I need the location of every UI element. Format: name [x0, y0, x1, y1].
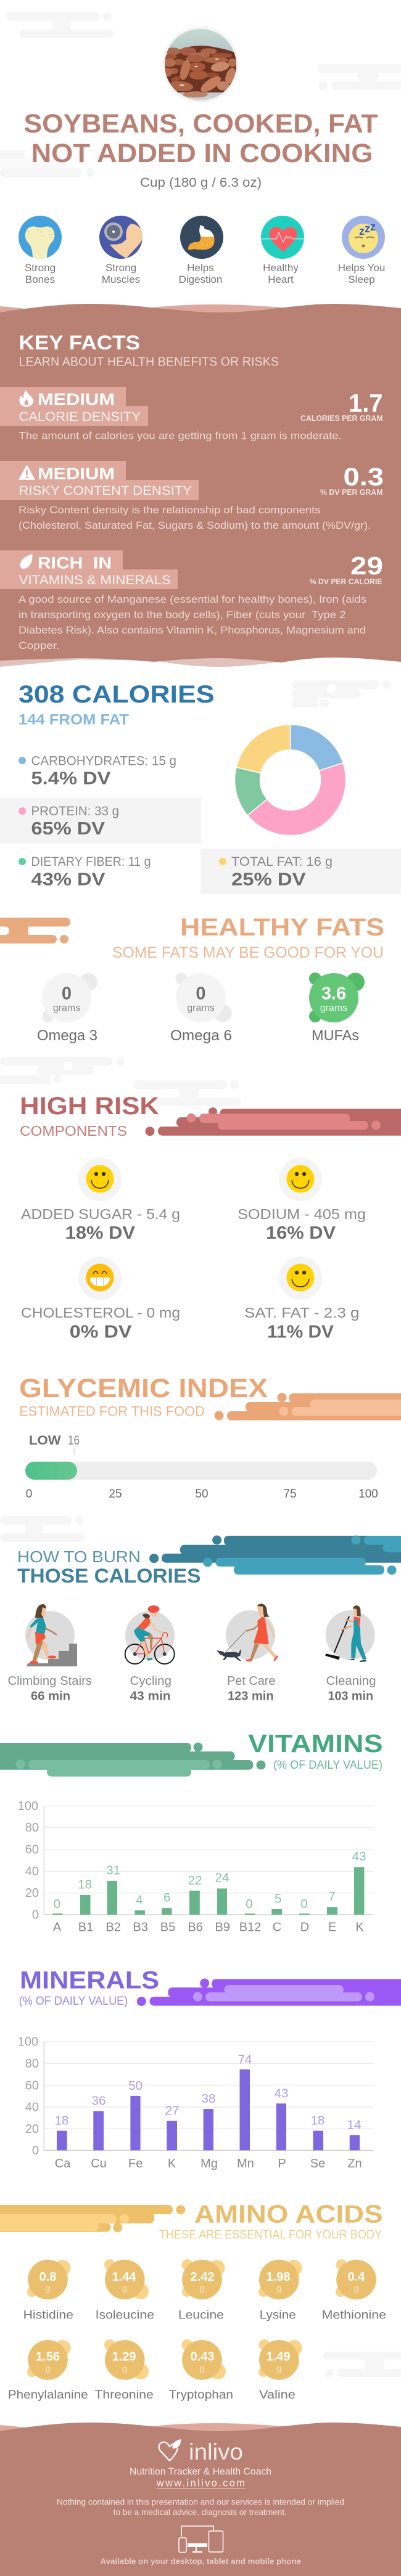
amino acids heading: THESE ARE ESSENTIAL FOR YOUR BODY [159, 2228, 382, 2242]
minerals bar chart: K [168, 2157, 176, 2170]
vitamins bar chart: 43 [352, 1849, 366, 1864]
amino: isoleucine: g [122, 2283, 127, 2294]
disclaimer: to be a medical advice, diagnosis or treatment. [114, 2508, 287, 2517]
amino: tryptophan: g [199, 2363, 205, 2374]
fact: calorie density: The amount of calories you are getting from 1 gram is moderate. [19, 430, 342, 441]
fact: rich in vitamins and minerals: VITAMINS & MINERALS [19, 573, 171, 587]
amino: lysine [258, 2260, 302, 2321]
activity: cleaning: 103 min [328, 1690, 373, 1703]
amino: lysine: Lysine [260, 2309, 296, 2321]
amino acids heading: AMINO ACIDS [194, 2200, 383, 2228]
amino: phenylalanine: 1.56 [36, 2350, 60, 2364]
amino: histidine: g [45, 2283, 51, 2294]
vitamins heading: (% OF DAILY VALUE) [273, 1759, 382, 1772]
benefit: helps digestion [179, 216, 223, 285]
macro: total fat: TOTAL FAT: 16 g [231, 855, 333, 869]
activity: climbing stairs: Climbing Stairs [7, 1674, 92, 1688]
healthy fats heading: HEALTHY FATS [180, 914, 384, 941]
food photo: beans [162, 26, 239, 103]
amino: leucine: Leucine [178, 2309, 224, 2321]
amino: isoleucine [96, 2259, 154, 2321]
risk: added sugar [21, 1158, 180, 1243]
fat: MUFAs: 3.6 [321, 984, 346, 1004]
benefit: helps you sleep: Sleep [348, 274, 375, 285]
benefit: healthy heart: Healthy [263, 262, 299, 274]
benefit: strong muscles: Strong [105, 262, 136, 274]
minerals heading [19, 1967, 159, 2008]
footer panel [0, 2423, 401, 2576]
activity: cycling: 43 min [130, 1690, 170, 1703]
healthy fats decoration [0, 918, 70, 944]
vitamins bar chart: 100 [18, 1800, 38, 1813]
amino: methionine: 0.4 [348, 2270, 365, 2284]
amino: threonine [94, 2339, 154, 2402]
vitamins bar chart: 6 [163, 1891, 170, 1904]
benefit: helps digestion: Digestion [179, 274, 222, 285]
macro: protein [0, 798, 201, 844]
activity: climbing stairs [7, 1604, 92, 1703]
activity: cleaning: Cleaning [326, 1674, 376, 1688]
glycemic index gauge: 0 [26, 1488, 32, 1501]
fact: calorie density: CALORIES PER GRAM [300, 414, 382, 423]
minerals decoration [137, 1978, 401, 2006]
risk: sodium: SODIUM - 405 mg [238, 1206, 366, 1222]
risk: cholesterol: 0% DV [70, 1323, 132, 1342]
macro: total fat [200, 849, 401, 894]
minerals bar chart: 100 [18, 2035, 38, 2048]
minerals bar chart: Se [310, 2157, 325, 2170]
benefit: strong bones: Strong [25, 262, 56, 274]
disclaimer: Nothing contained in this presentation and our services is intended or implied [57, 2497, 344, 2507]
title: SOYBEANS, COOKED, FAT [23, 109, 378, 139]
vitamins bar chart: 7 [328, 1889, 336, 1904]
minerals bar chart: 0 [32, 2144, 39, 2158]
amino acids heading [159, 2200, 383, 2242]
amino: lysine: g [276, 2283, 281, 2294]
amino: threonine: g [122, 2363, 127, 2374]
fact: risky content density: RISKY CONTENT DENSITY [19, 484, 192, 498]
fat: omega 3: Omega 3 [37, 1027, 97, 1044]
fact: risky content density: % DV PER GRAM [320, 488, 382, 497]
amino: threonine: 1.29 [112, 2350, 136, 2364]
glycemic index gauge: 16 [68, 1433, 80, 1448]
glycemic index gauge: 100 [358, 1488, 378, 1501]
healthy fats heading: SOME FATS MAY BE GOOD FOR YOU [112, 944, 384, 961]
amino: phenylalanine: g [45, 2363, 51, 2374]
risk: saturated fat: 11% DV [267, 1323, 334, 1342]
fat: omega 6 [170, 972, 232, 1044]
vitamins bar chart: K [355, 1921, 364, 1934]
vitamins bar chart: E [328, 1921, 336, 1934]
fat: omega 6: grams [187, 1003, 215, 1014]
minerals bar chart: 74 [238, 2052, 252, 2067]
amino: leucine: 2.42 [191, 2270, 214, 2284]
macro: carbohydrates [19, 754, 176, 789]
minerals bar chart: P [278, 2157, 286, 2170]
amino: phenylalanine [8, 2340, 88, 2402]
benefit: helps you sleep [338, 216, 385, 285]
glycemic index gauge: LOW [29, 1433, 61, 1448]
glycemic index heading: GLYCEMIC INDEX [19, 1374, 268, 1403]
amino: threonine: Threonine [94, 2389, 154, 2402]
vitamins bar chart: B5 [160, 1921, 175, 1934]
amino: valine: g [276, 2363, 281, 2374]
amino: methionine: Methionine [322, 2309, 386, 2321]
amino: tryptophan [169, 2339, 233, 2402]
minerals bar chart: 38 [202, 2092, 215, 2106]
activity: cycling [125, 1605, 175, 1703]
key facts heading: KEY FACTS [19, 332, 140, 354]
activity: pet care: Pet Care [227, 1674, 275, 1688]
vitamins heading: VITAMINS [248, 1729, 383, 1758]
fat: omega 3: 0 [62, 984, 72, 1004]
benefit: strong bones [19, 216, 62, 285]
vitamins bar chart: 24 [215, 1871, 229, 1885]
fat: omega 3: grams [53, 1003, 80, 1014]
minerals bar chart: 20 [25, 2122, 39, 2136]
activity: climbing stairs: 66 min [31, 1690, 70, 1703]
risk: saturated fat: SAT. FAT - 2.3 g [244, 1305, 359, 1321]
minerals heading: MINERALS [20, 1967, 159, 1994]
macro: dietary fiber [19, 855, 151, 890]
fact: risky content density [0, 461, 384, 531]
amino: tryptophan: Tryptophan [169, 2389, 233, 2402]
vitamins bar chart: B3 [133, 1921, 148, 1934]
vitamins bar chart: 60 [25, 1843, 39, 1856]
vitamins bar chart: B2 [105, 1921, 121, 1934]
vitamins decoration [0, 1743, 265, 1777]
disclaimer [57, 2497, 344, 2517]
key facts heading: LEARN ABOUT HEALTH BENEFITS OR RISKS [19, 355, 279, 369]
fact: rich in vitamins and minerals: Diabetes Risk). Also contains Vitamin K, Phosphorus, Magnesium and [19, 624, 366, 636]
benefit: helps you sleep: z [365, 222, 370, 235]
benefit: healthy heart: Heart [268, 274, 294, 285]
fact: rich in vitamins and minerals: Copper. [19, 640, 59, 651]
fact: rich in vitamins and minerals: 29 [350, 552, 383, 580]
activity: pet care: 123 min [228, 1690, 274, 1703]
glycemic index gauge: 75 [283, 1488, 297, 1501]
minerals bar chart: Mn [237, 2157, 254, 2170]
fact: risky content density: Risky Content density is the relationship of bad components [19, 504, 321, 516]
serving size: Cup (180 g / 6.3 oz) [140, 176, 262, 190]
amino acids decoration [0, 2205, 185, 2232]
availability note: Available on your desktop, tablet and mobile phone [100, 2556, 301, 2566]
activity: pet care [217, 1604, 278, 1703]
burn calories heading: HOW TO BURN [17, 1547, 141, 1566]
vitamins bar chart: 0 [32, 1908, 39, 1922]
fact: calorie density: CALORIE DENSITY [19, 410, 141, 424]
tagline: Nutrition Tracker & Health Coach [130, 2466, 271, 2477]
vitamins bar chart: 80 [25, 1821, 39, 1835]
high risk heading [20, 1093, 159, 1139]
macro: protein: PROTEIN: 33 g [31, 804, 119, 818]
panel: key facts [0, 304, 401, 667]
inlivo logo: inlivo [189, 2439, 243, 2464]
fact: rich in vitamins and minerals: A good source of Manganese (essential for healthy bones), Iron (aids [19, 593, 366, 605]
inlivo logo [159, 2439, 243, 2464]
healthy fats heading [112, 914, 384, 961]
vitamins bar chart: 22 [188, 1873, 202, 1888]
burn calories heading: THOSE CALORIES [17, 1565, 201, 1587]
calories heading: 144 FROM FAT [19, 712, 129, 728]
vitamins heading [248, 1729, 383, 1772]
amino: histidine: 0.8 [39, 2270, 56, 2284]
calories heading [19, 681, 215, 728]
amino: valine: 1.49 [267, 2350, 290, 2364]
amino: histidine: Histidine [23, 2309, 73, 2321]
fat: omega 6: 0 [196, 984, 206, 1004]
minerals bar chart: Mg [200, 2157, 218, 2170]
macro: carbohydrates: 5.4% DV [31, 769, 111, 789]
fact: rich in vitamins and minerals [0, 550, 383, 651]
minerals bar chart: Cu [91, 2157, 107, 2170]
fact: calorie density [0, 387, 382, 441]
fact: risky content density: 0.3 [343, 462, 384, 491]
risk: added sugar: ADDED SUGAR - 5.4 g [21, 1206, 180, 1222]
vitamins bar chart: 0 [300, 1897, 308, 1911]
donut chart [235, 725, 345, 836]
minerals bar chart: 36 [92, 2094, 105, 2108]
vitamins bar chart: 5 [275, 1892, 281, 1906]
fat: omega 6: Omega 6 [170, 1027, 232, 1044]
amino: methionine [322, 2259, 386, 2321]
vitamins bar chart: A [53, 1921, 62, 1934]
benefit: helps you sleep: Helps You [338, 262, 385, 274]
amino: valine: Valine [259, 2389, 296, 2402]
title: NOT ADDED IN COOKING [31, 139, 373, 168]
fact: rich in vitamins and minerals: RICH IN [38, 553, 112, 572]
burn calories heading [17, 1547, 201, 1587]
amino: isoleucine: 1.44 [112, 2270, 136, 2284]
fat: MUFAs: MUFAs [312, 1027, 359, 1044]
amino: leucine: g [199, 2283, 205, 2294]
vitamins bar chart: 0 [54, 1897, 60, 1911]
icon: devices [179, 2526, 223, 2553]
minerals bar chart [18, 2035, 373, 2170]
fact: risky content density: MEDIUM [38, 465, 115, 483]
vitamins bar chart: B6 [188, 1921, 203, 1934]
amino: methionine: g [353, 2283, 359, 2294]
fact: calorie density: MEDIUM [38, 390, 115, 409]
high risk heading: COMPONENTS [20, 1123, 127, 1139]
vitamins bar chart: 20 [25, 1886, 39, 1900]
minerals bar chart: 60 [25, 2079, 39, 2093]
fact: risky content density: (Cholesterol, Saturated Fat, Sugars & Sodium) to the amount (%DV/gr). [19, 520, 371, 531]
minerals bar chart: 80 [25, 2057, 39, 2071]
minerals bar chart: Zn [347, 2157, 362, 2170]
macro: protein: 65% DV [31, 819, 105, 839]
vitamins bar chart: C [273, 1921, 281, 1934]
benefit: strong bones: Bones [25, 274, 55, 285]
amino: isoleucine: Isoleucine [96, 2309, 154, 2321]
fat: omega 3 [37, 973, 97, 1044]
benefit: helps you sleep: z [370, 221, 376, 233]
minerals bar chart: Fe [128, 2157, 143, 2170]
glycemic index gauge [25, 1433, 378, 1501]
vitamins bar chart: 4 [136, 1893, 143, 1907]
activity: cleaning [325, 1605, 376, 1703]
fact: rich in vitamins and minerals: % DV PER CALORIE [310, 577, 382, 586]
minerals bar chart: 18 [311, 2114, 325, 2127]
vitamins bar chart [18, 1800, 373, 1934]
minerals bar chart: 18 [55, 2114, 68, 2127]
benefit: strong muscles [99, 216, 144, 285]
risk: cholesterol: CHOLESTEROL - 0 mg [21, 1305, 180, 1321]
fat: MUFAs: grams [320, 1003, 347, 1014]
benefit: healthy heart [261, 216, 304, 285]
vitamins bar chart: 0 [246, 1897, 253, 1911]
activity: cycling: Cycling [130, 1674, 172, 1688]
glycemic index heading: ESTIMATED FOR THIS FOOD [19, 1404, 205, 1419]
minerals bar chart: Ca [55, 2157, 71, 2170]
minerals heading: (% OF DAILY VALUE) [19, 1995, 128, 2008]
amino: valine [258, 2339, 302, 2402]
high risk decoration [146, 1107, 401, 1136]
vitamins bar chart: 40 [25, 1865, 39, 1878]
benefit: helps you sleep: z [359, 225, 365, 237]
key facts heading [19, 332, 279, 369]
glycemic index gauge: 50 [195, 1488, 209, 1501]
macro: carbohydrates: CARBOHYDRATES: 15 g [31, 754, 176, 768]
fat: MUFAs [309, 972, 365, 1044]
risk: saturated fat [244, 1257, 359, 1342]
minerals bar chart: 27 [165, 2104, 179, 2118]
macro: dietary fiber: 43% DV [31, 870, 105, 890]
minerals bar chart: 40 [25, 2100, 39, 2114]
vitamins bar chart: D [300, 1921, 309, 1934]
risk: added sugar: 18% DV [65, 1223, 136, 1243]
amino: histidine [23, 2260, 73, 2321]
minerals bar chart: 50 [128, 2079, 143, 2093]
amino: leucine [178, 2259, 225, 2321]
vitamins bar chart: B9 [215, 1921, 230, 1934]
fact: rich in vitamins and minerals: in transporting oxygen to the body cells), Fiber (cuts your Type 2 [19, 609, 345, 621]
vitamins bar chart: B12 [239, 1921, 261, 1934]
fact: calorie density: 1.7 [349, 389, 382, 417]
burn calories decoration [149, 1536, 401, 1575]
vitamins bar chart: 31 [106, 1864, 120, 1877]
risk: sodium [238, 1158, 366, 1243]
vitamins bar chart: 18 [78, 1877, 92, 1892]
minerals bar chart: 14 [347, 2117, 361, 2132]
amino: phenylalanine: Phenylalanine [8, 2389, 88, 2402]
benefit: helps digestion: Helps [187, 262, 214, 274]
macro: total fat: 25% DV [231, 870, 306, 890]
glycemic index gauge: 25 [109, 1488, 122, 1501]
amino: lysine: 1.98 [267, 2270, 290, 2284]
risk: cholesterol [21, 1257, 180, 1342]
high risk heading: HIGH RISK [20, 1093, 159, 1120]
glycemic index decoration [215, 1393, 401, 1420]
calories heading: 308 CALORIES [19, 681, 215, 708]
minerals bar chart: 43 [275, 2086, 288, 2100]
vitamins bar chart: B1 [78, 1921, 93, 1934]
macro: dietary fiber: DIETARY FIBER: 11 g [31, 855, 151, 869]
risk: sodium: 16% DV [266, 1223, 336, 1243]
title [23, 109, 378, 168]
amino: tryptophan: 0.43 [191, 2350, 214, 2364]
benefit: strong muscles: Muscles [102, 274, 140, 285]
website link: www.inlivo.com [156, 2478, 245, 2489]
glycemic index heading [19, 1374, 268, 1419]
